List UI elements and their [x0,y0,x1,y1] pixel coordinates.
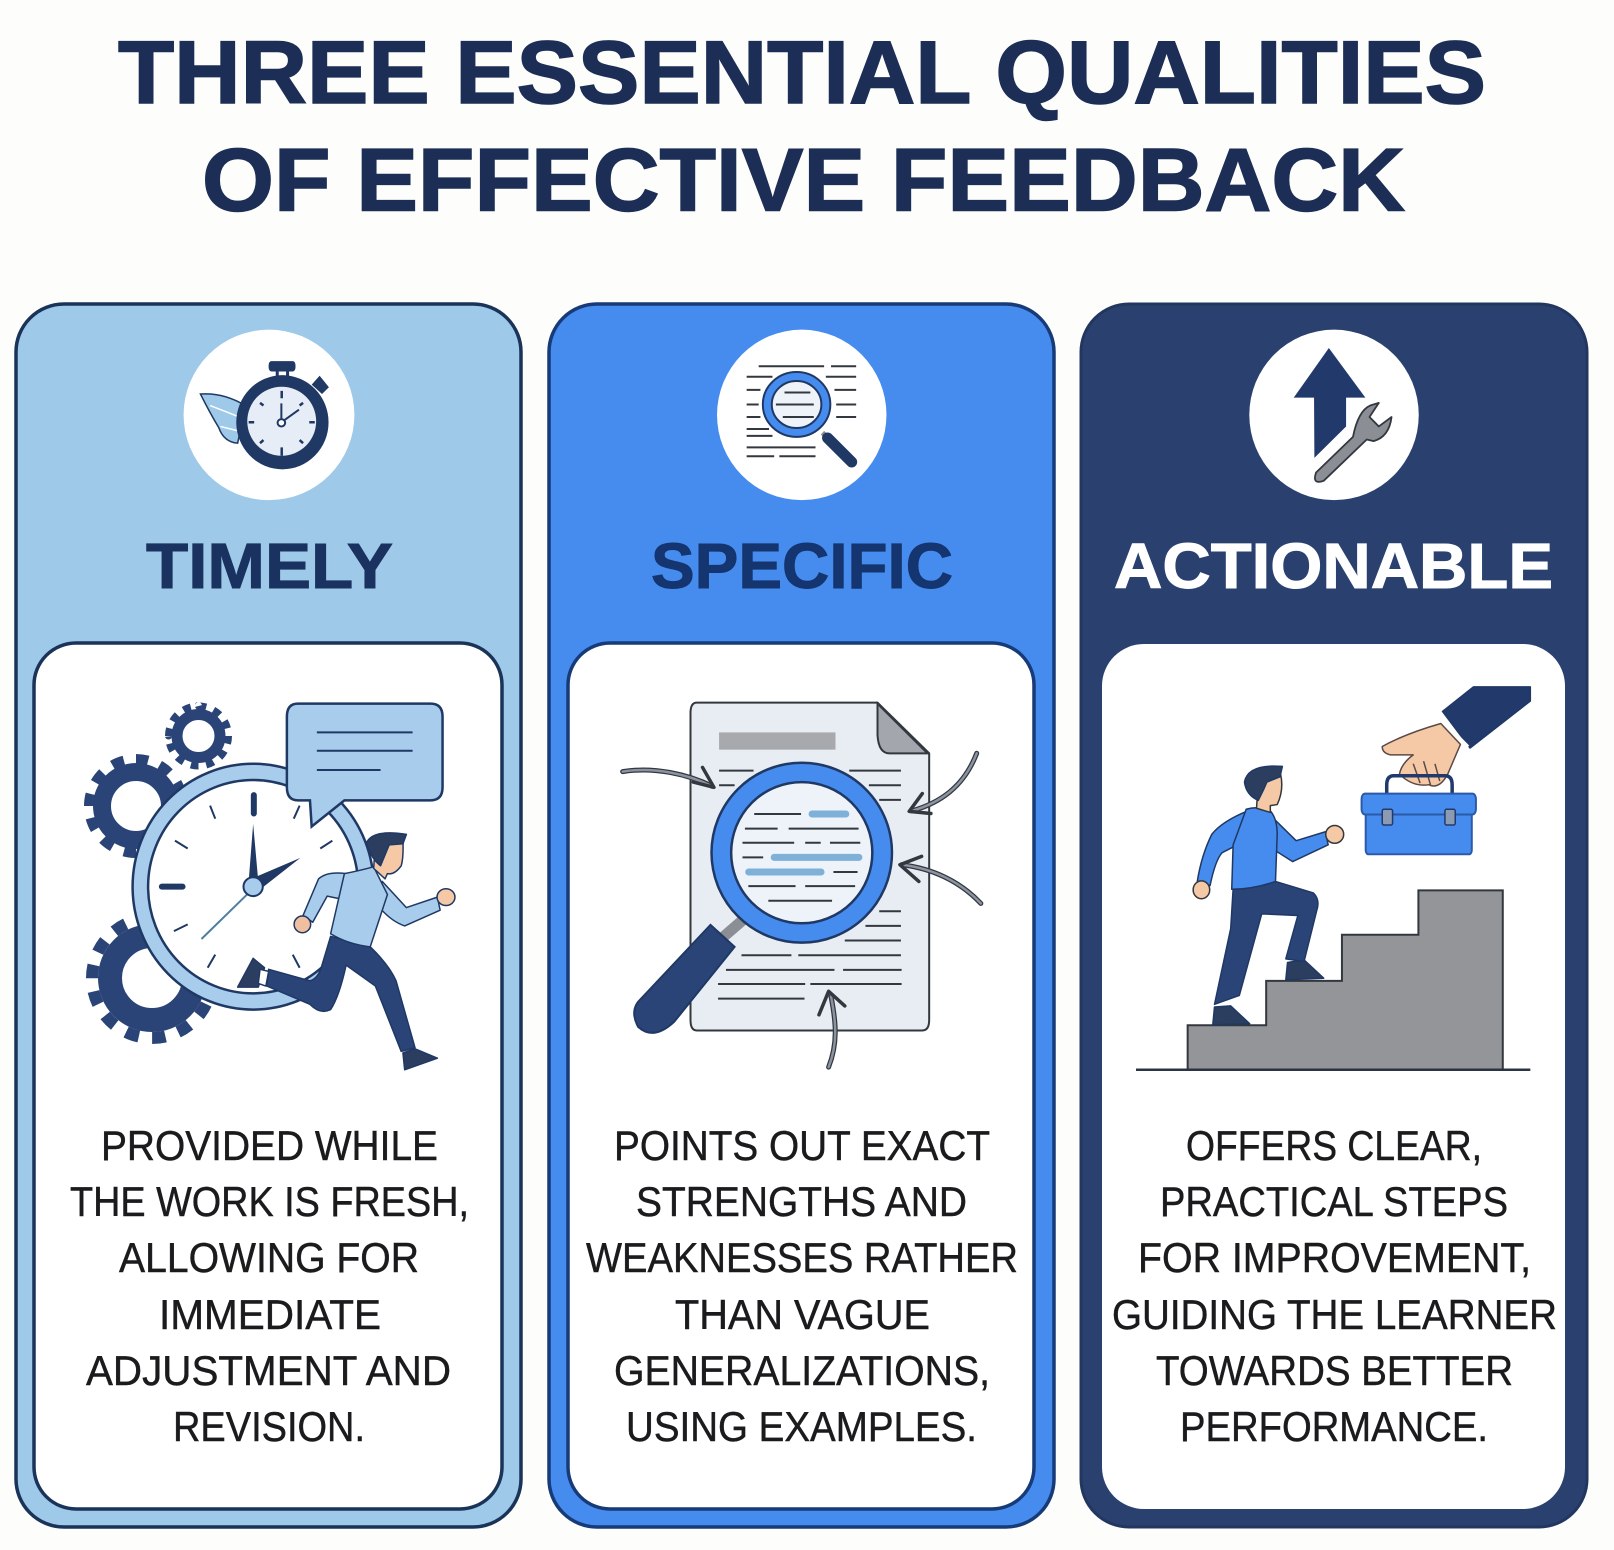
title [118,22,1486,230]
content card: actionable [1102,644,1565,1509]
illustration: document under magnifier [623,703,981,1067]
illustration: stairs, toolbox and climber [1136,687,1530,1070]
description: timely: THE WORK IS FRESH, [70,1178,469,1225]
description: actionable: PERFORMANCE. [1180,1403,1488,1450]
icon: magnifier over text [717,330,886,500]
description: actionable: PRACTICAL STEPS [1160,1178,1508,1225]
description: timely [70,1122,469,1450]
arrow: top right [909,753,977,813]
title: THREE ESSENTIAL QUALITIES [118,22,1486,122]
icon: arrow and wrench [1249,330,1419,500]
magnifying glass [634,763,892,1033]
panel: timely [16,304,521,1527]
description: actionable: FOR IMPROVEMENT, [1138,1234,1531,1281]
description: actionable: OFFERS CLEAR, [1186,1122,1482,1169]
heading: specific: SPECIFIC [651,530,953,602]
description: specific: POINTS OUT EXACT [614,1122,990,1169]
content card: specific [568,643,1034,1509]
description: timely: REVISION. [173,1403,365,1450]
description: specific: USING EXAMPLES. [626,1403,977,1450]
toolbox [1362,776,1476,854]
illustration: gears [89,706,228,1038]
document [691,703,929,1031]
icon: winged stopwatch [184,330,354,500]
description: timely: IMMEDIATE [159,1291,381,1338]
panel: actionable [1081,304,1587,1527]
speech bubble [287,704,443,827]
runner [238,833,455,1070]
description: actionable: TOWARDS BETTER [1156,1347,1513,1394]
description: timely: ADJUSTMENT AND [86,1347,451,1394]
content card: timely [34,643,502,1509]
clock [133,764,374,1010]
title: OF EFFECTIVE FEEDBACK [202,130,1405,230]
description: timely: ALLOWING FOR [119,1234,419,1281]
panel: specific [549,304,1054,1527]
description: specific: GENERALIZATIONS, [614,1347,990,1394]
arrow: bottom [819,991,845,1067]
arrow: middle right [900,856,981,903]
arrow: top left [623,767,714,787]
helping hand [1382,687,1530,786]
description: actionable: GUIDING THE LEARNER [1112,1291,1557,1338]
description: specific: WEAKNESSES RATHER [586,1234,1018,1281]
description: specific: STRENGTHS AND [636,1178,967,1225]
illustration: clock, speech bubble and runner [133,704,455,1070]
description: specific [586,1122,1018,1450]
stairs [1136,890,1530,1070]
heading: timely: TIMELY [146,530,393,602]
description: actionable [1112,1122,1557,1450]
climber [1193,766,1344,1025]
heading: actionable: ACTIONABLE [1114,530,1553,602]
description: timely: PROVIDED WHILE [101,1122,438,1169]
description: specific: THAN VAGUE [675,1291,930,1338]
